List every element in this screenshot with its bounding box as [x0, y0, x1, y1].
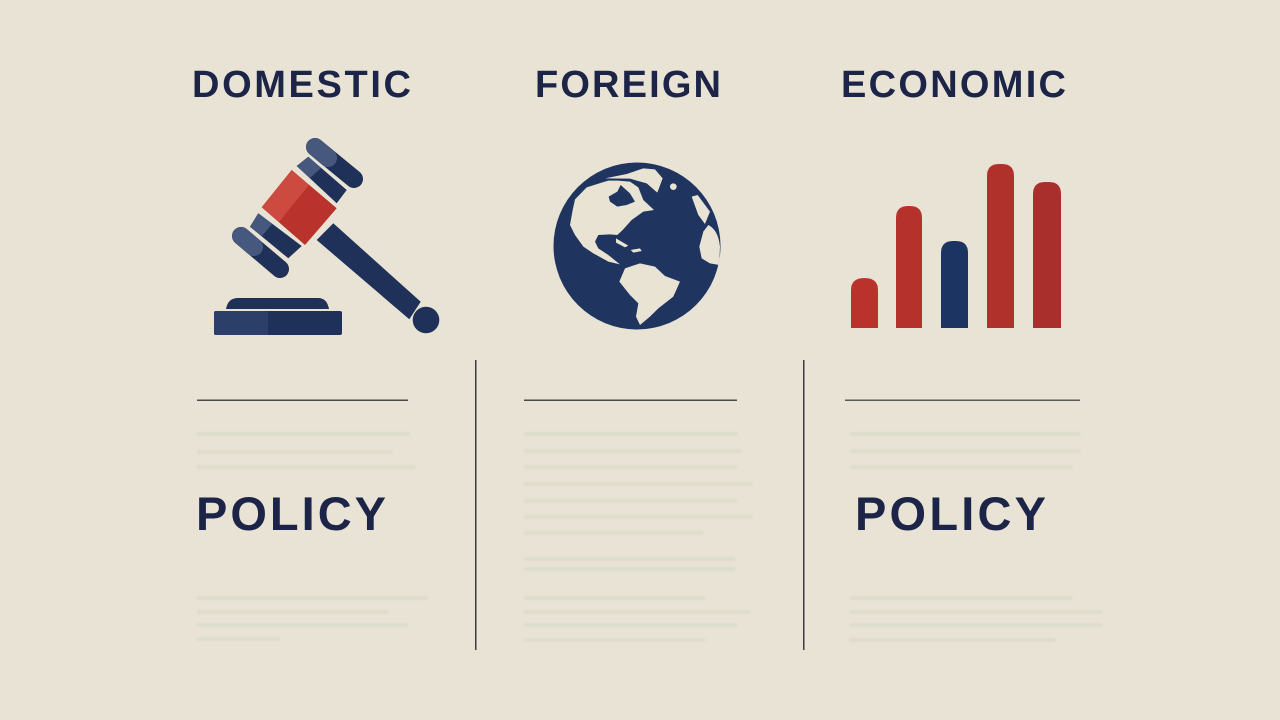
- north america: [570, 181, 654, 264]
- gavel upper band highlight: [297, 157, 321, 178]
- gavel lower band: [250, 213, 302, 258]
- iceland: [670, 183, 677, 190]
- faint text: economic upper: [850, 434, 1080, 467]
- bar 3: [941, 241, 968, 328]
- globe land: [570, 168, 720, 325]
- faint text: domestic lower: [197, 598, 428, 639]
- heading: economic: ECONOMIC: [841, 64, 1066, 106]
- faint text: foreign body: [524, 434, 752, 640]
- gavel lower cap highlight: [241, 236, 254, 247]
- faint text: domestic upper: [197, 434, 415, 467]
- heading: policy right: POLICY: [855, 487, 1046, 540]
- bar 1: [851, 278, 878, 328]
- gavel upper band: [297, 157, 347, 203]
- faint text: economic lower: [850, 598, 1102, 640]
- europe: [692, 195, 710, 224]
- bar 4: [987, 164, 1014, 328]
- icon: globe: [554, 162, 720, 330]
- bar 2: [896, 206, 922, 328]
- south america: [619, 263, 680, 325]
- africa: [699, 225, 720, 265]
- greenland: [605, 168, 663, 193]
- gavel head highlight: [262, 170, 309, 222]
- icon: bar chart: [851, 164, 1061, 328]
- globe ocean: [554, 162, 720, 330]
- caribbean islands: [616, 238, 642, 253]
- hudson bay: [609, 185, 635, 207]
- column divider right: [803, 360, 804, 650]
- gavel lower cap: [241, 236, 280, 269]
- gavel upper cap: [315, 147, 354, 179]
- bar 5: [1033, 182, 1061, 328]
- gavel upper cap highlight: [315, 147, 328, 158]
- gavel base highlight: [214, 311, 268, 335]
- gavel lower band highlight: [250, 213, 272, 236]
- gavel base: [214, 311, 342, 335]
- gavel knob: [413, 307, 439, 333]
- column divider left: [475, 360, 476, 650]
- gavel red head: [262, 170, 337, 245]
- gavel handle: [317, 223, 421, 319]
- heading: policy left: POLICY: [196, 487, 386, 540]
- heading: foreign: FOREIGN: [535, 64, 721, 106]
- gavel base top: [226, 298, 329, 309]
- icon: gavel: [214, 147, 439, 335]
- heading: domestic: DOMESTIC: [192, 64, 411, 106]
